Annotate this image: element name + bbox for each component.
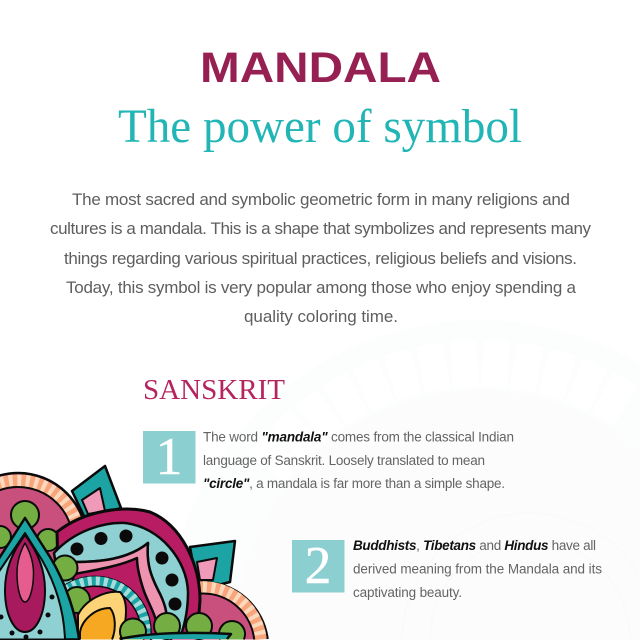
subtitle: The power of symbol: [118, 100, 522, 153]
magenta arch: [57, 509, 200, 640]
number badge 1: [143, 428, 196, 486]
inner magenta field: [70, 543, 167, 640]
watermark: faint background mandala: [166, 320, 640, 640]
bottom teal band: [120, 633, 231, 639]
intro paragraph: cultures is a mandala. This is a shape that symbolizes and represents many: [50, 219, 592, 238]
intro paragraph: things regarding various spiritual practices, religious beliefs and visions.: [64, 249, 577, 268]
light teal inner drop: [0, 533, 65, 640]
lower green circles: [120, 613, 245, 640]
text block 1: [203, 430, 514, 491]
number badge 1: 1: [156, 428, 182, 486]
light teal band: [54, 523, 188, 640]
text block 1: The word "mandala" comes from the classical Indian: [203, 430, 514, 444]
illustration: colorful mandala: [0, 466, 268, 640]
green circles: [0, 501, 59, 551]
intro paragraph: The most sacred and symbolic geometric form in many religions and: [72, 190, 570, 209]
band dots: [70, 530, 182, 610]
drop dots: [0, 594, 54, 640]
striped arc: [39, 576, 151, 639]
intro paragraph: Today, this symbol is very popular among those who enjoy spending a: [66, 278, 577, 297]
intro paragraph: quality coloring time.: [244, 307, 398, 326]
intro paragraph: [50, 190, 592, 326]
side green circles: [52, 556, 90, 613]
dark magenta drop: [5, 535, 45, 632]
text block 1: "circle", a mandala is far more than a simple shape.: [203, 476, 505, 491]
title: MANDALA: [200, 44, 441, 92]
teal point top: [72, 466, 121, 518]
yellow petal: [78, 592, 126, 640]
orange petal: [80, 608, 115, 640]
number badge 2: [292, 537, 344, 595]
teal point right: [190, 541, 235, 590]
section heading: Sanskrit: SANSKRIT: [143, 375, 285, 406]
text block 2: [353, 538, 602, 600]
right rose disc with striped band: [138, 582, 268, 640]
text block 2: Buddhists, Tibetans and Hindus have all: [353, 538, 596, 553]
text block 2: captivating beauty.: [353, 585, 462, 600]
pink inner drop: [17, 543, 34, 602]
number badge 2: 2: [305, 537, 331, 595]
pink ribbon: [74, 543, 167, 624]
top-left rose disc with striped band: [0, 473, 87, 611]
left teal drop: [0, 518, 79, 640]
text block 1: language of Sanskrit. Loosely translated to mean: [203, 453, 485, 468]
text block 2: derived meaning from the Mandala and its: [353, 562, 602, 576]
